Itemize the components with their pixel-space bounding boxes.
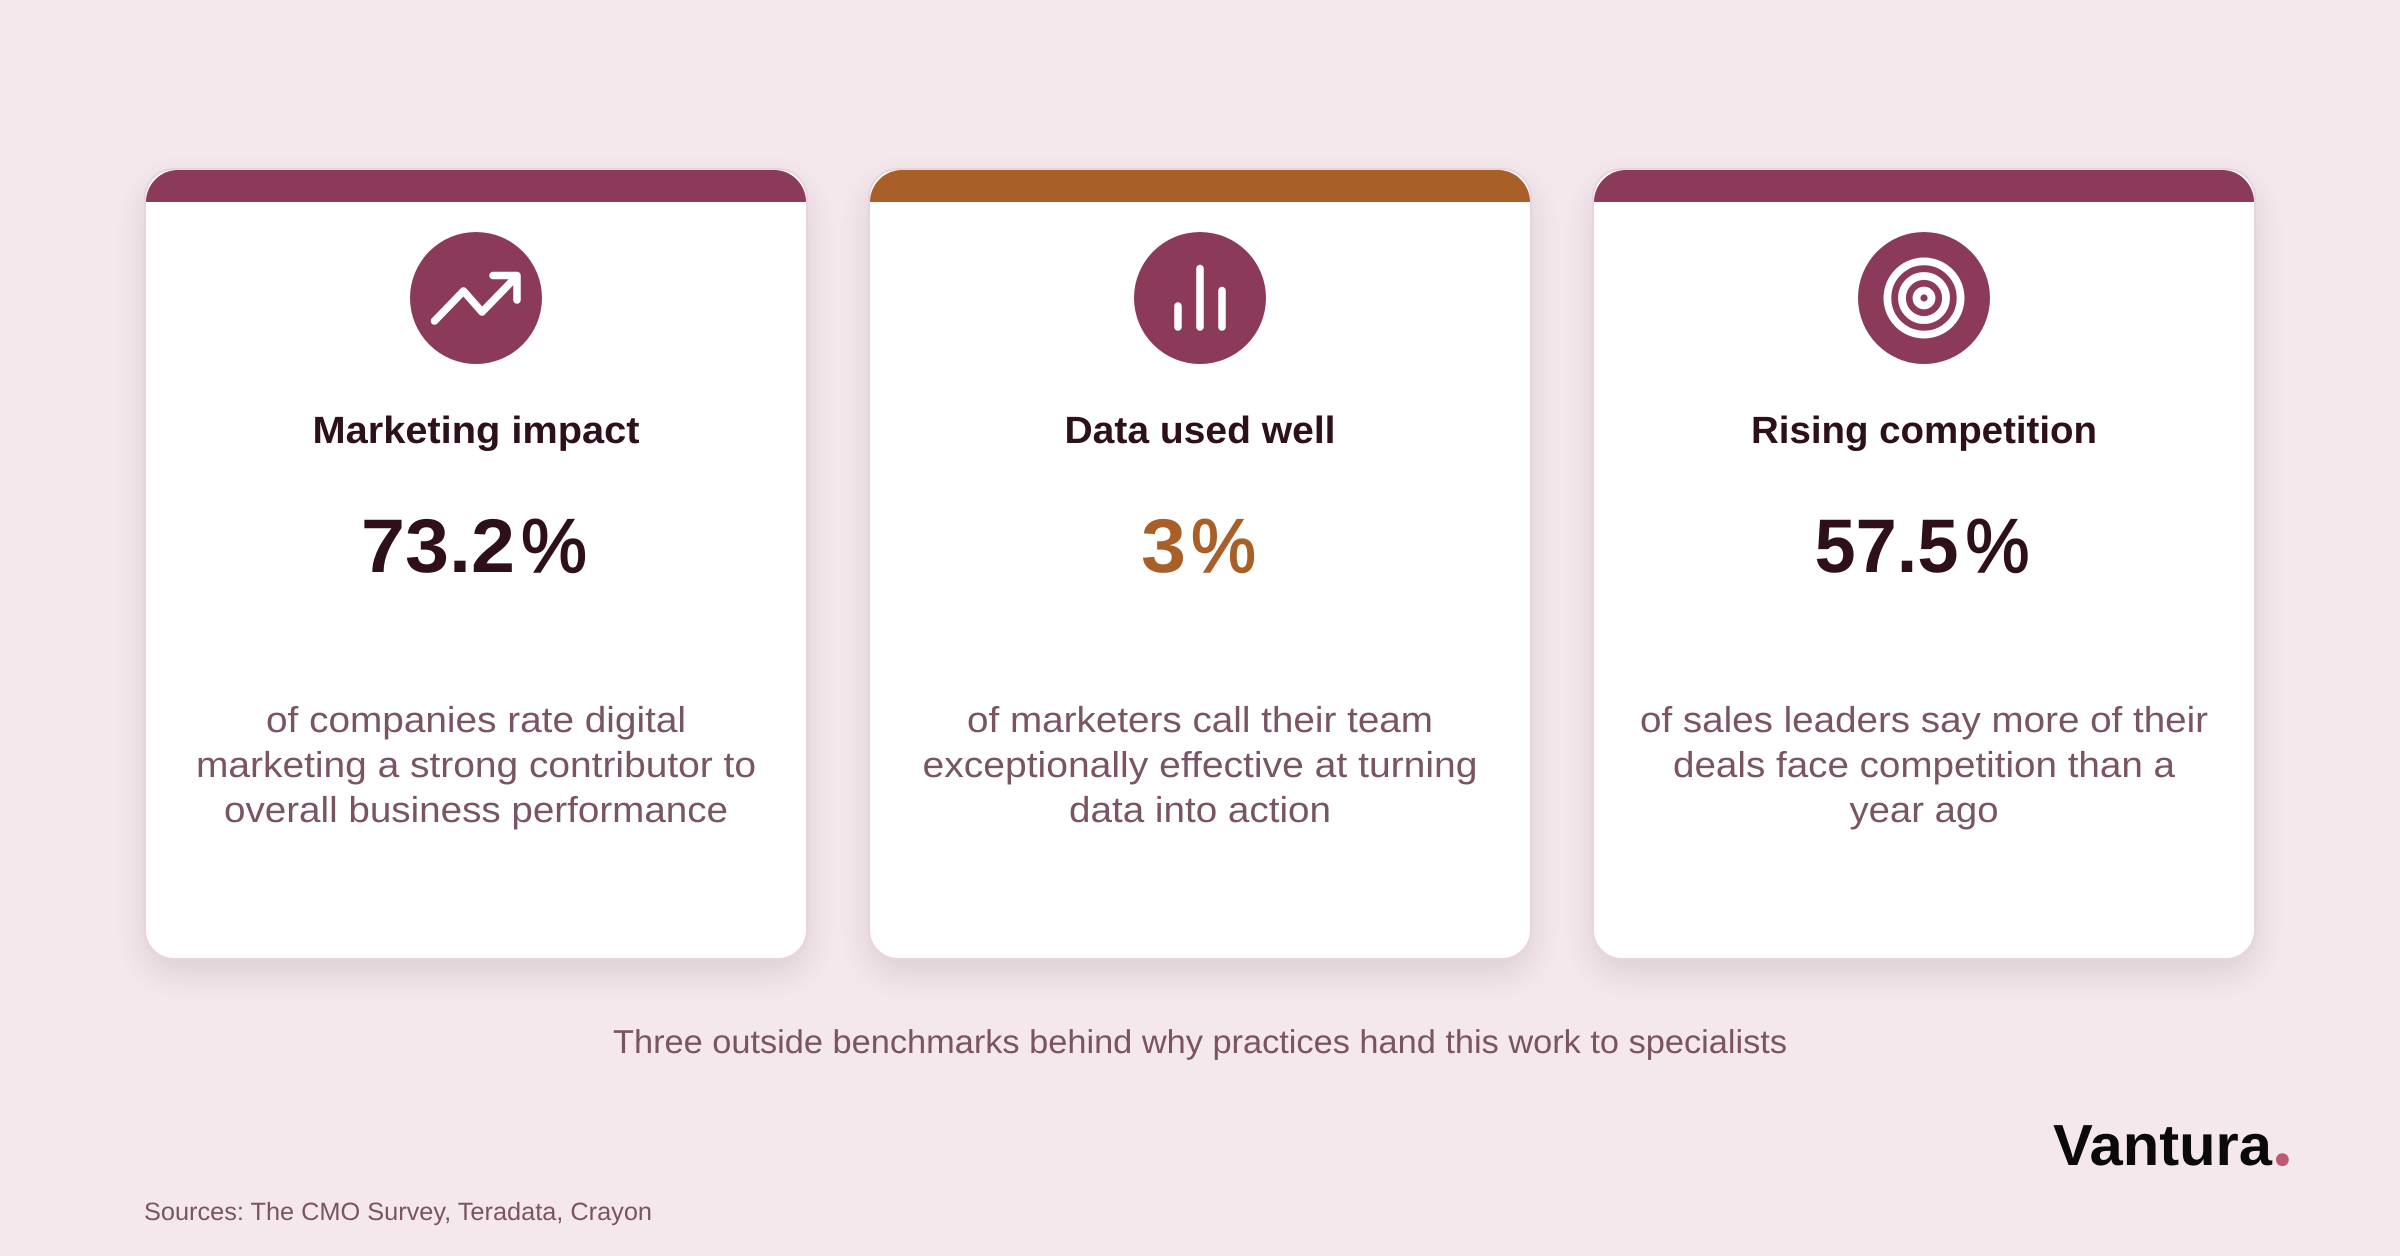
top accent bar: amber <box>870 170 1530 202</box>
description text: deals face competition than a <box>1673 744 2176 785</box>
description text <box>196 699 756 830</box>
sources footnote: Sources: The CMO Survey, Teradata, Crayon <box>144 1198 652 1226</box>
panel: rising competition card <box>1592 168 2256 960</box>
description text: overall business performance <box>224 789 728 830</box>
description text: data into action <box>1069 789 1331 830</box>
panel: marketing impact card <box>144 168 808 960</box>
heading: data used well: Data used well <box>1064 410 1336 452</box>
stat: 73.2%: % <box>521 504 587 589</box>
heading: rising competition: Rising competition <box>1751 410 2097 452</box>
stat: 57.5% <box>1814 504 2030 589</box>
stat: 73.2% <box>361 504 587 589</box>
card content: marketing impact <box>196 232 756 830</box>
caption: Three outside benchmarks behind why practices hand this work to specialists <box>613 1023 1787 1060</box>
top accent bar: plum <box>1594 170 2254 202</box>
panel: data used well card <box>868 168 1532 960</box>
icon: trending up arrow <box>410 232 542 364</box>
stat: 3% <box>1141 504 1256 589</box>
description text: of companies rate digital <box>266 699 686 740</box>
stat: 73.2%: 73.2 <box>361 504 515 589</box>
stat: 57.5%: 57.5 <box>1814 504 1958 589</box>
description text: of marketers call their team <box>967 699 1433 740</box>
card content: rising competition <box>1640 232 2208 830</box>
description text: marketing a strong contributor to <box>196 744 756 785</box>
logo: Vantura: Vantura <box>2053 1113 2273 1178</box>
stat: 3%: % <box>1191 504 1256 589</box>
description text <box>922 699 1478 830</box>
description text: exceptionally effective at turning <box>922 744 1478 785</box>
stat: 57.5%: % <box>1966 504 2030 589</box>
description text: year ago <box>1850 789 1998 830</box>
description text <box>1640 699 2208 830</box>
icon: target <box>1858 232 1990 364</box>
description text: of sales leaders say more of their <box>1640 699 2208 740</box>
logo: Vantura: . <box>2274 1111 2291 1178</box>
card content: data used well <box>922 232 1478 830</box>
icon: bar chart <box>1134 232 1266 364</box>
stat: 3%: 3 <box>1141 504 1186 589</box>
heading: marketing impact: Marketing impact <box>312 410 640 452</box>
top accent bar: plum <box>146 170 806 202</box>
